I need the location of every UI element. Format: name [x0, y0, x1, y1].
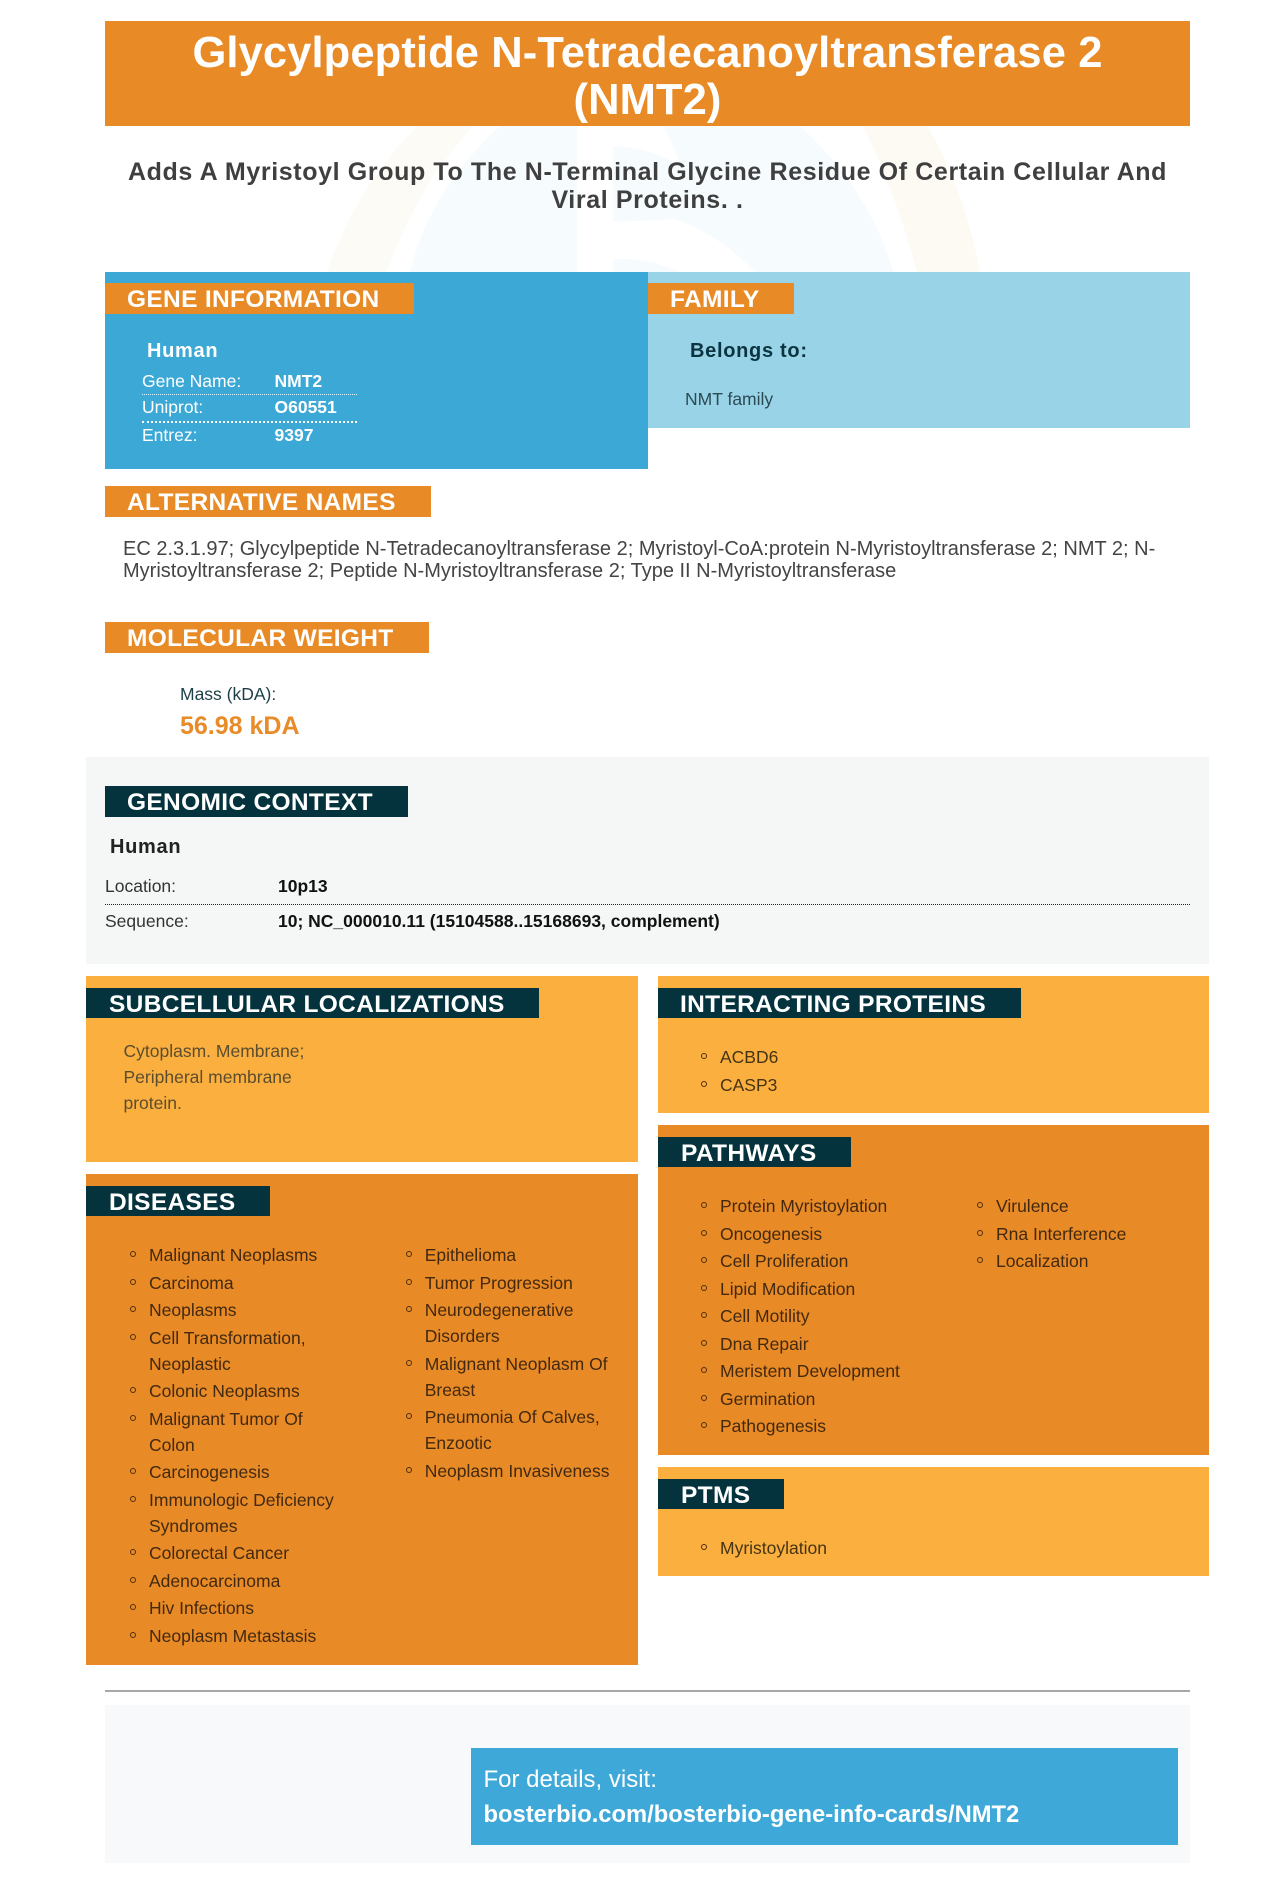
disease list column 2: Breast — [425, 1380, 475, 1400]
panel: family — [648, 272, 1190, 428]
disease list column 2 — [406, 1245, 610, 1480]
panel: interacting proteins — [658, 976, 1209, 1112]
localization text: protein. — [124, 1093, 182, 1113]
subtitle: Viral Proteins. . — [551, 186, 744, 214]
watermark logo — [327, 126, 980, 272]
disease list column 1: Cell Transformation, — [149, 1328, 306, 1348]
gene name row — [142, 373, 357, 395]
localization text: Peripheral membrane — [124, 1067, 292, 1087]
disease list column 1 — [130, 1245, 334, 1646]
panel: subcellular localizations — [86, 976, 638, 1162]
pathway list column 1: Germination — [720, 1388, 815, 1408]
entrez row: Entrez: — [142, 425, 197, 445]
location row: 10p13 — [278, 876, 328, 896]
disease list column 1: Neoplasm Metastasis — [149, 1626, 316, 1646]
heading: family — [648, 283, 794, 314]
belongs to label: Belongs to: — [690, 340, 808, 362]
uniprot row — [142, 399, 357, 423]
disease list column 1: Malignant Neoplasms — [149, 1245, 317, 1265]
heading: molecular weight: MOLECULAR WEIGHT — [127, 625, 394, 652]
location row — [105, 878, 1190, 905]
panel: diseases — [86, 1174, 638, 1665]
entrez row — [142, 425, 313, 445]
pathway list column 2: Virulence — [996, 1196, 1069, 1216]
pathway list column 1: Oncogenesis — [720, 1224, 822, 1244]
pathway list column 2: Localization — [996, 1251, 1088, 1271]
disease list column 2: Neurodegenerative — [425, 1300, 574, 1320]
callout label: For details, visit: — [484, 1766, 657, 1792]
heading: pathways — [658, 1137, 851, 1167]
disease list column 2: Enzootic — [425, 1433, 492, 1453]
pathway list column 2: Rna Interference — [996, 1224, 1126, 1244]
family value: NMT family — [685, 389, 773, 409]
pathway list column 1: Protein Myristoylation — [720, 1196, 887, 1216]
heading: genomic context: GENOMIC CONTEXT — [127, 789, 373, 816]
alternative names text: Myristoyltransferase 2; Peptide N-Myristoyltransferase 2; Type II N-Myristoyltransferase — [123, 560, 896, 582]
disease list column 1: Colorectal Cancer — [149, 1543, 289, 1563]
subtitle: Adds A Myristoyl Group To The N-Terminal Glycine Residue Of Certain Cellular And — [128, 158, 1167, 186]
species label: Human — [110, 836, 181, 858]
pathway list column 1: Cell Proliferation — [720, 1251, 848, 1271]
footer panel — [105, 1705, 1190, 1863]
heading: pathways: PATHWAYS — [681, 1140, 817, 1167]
pathway list column 1: Meristem Development — [720, 1361, 900, 1381]
title banner — [105, 21, 1190, 126]
disease list column 1: Malignant Tumor Of — [149, 1408, 303, 1428]
heading: subcellular localizations: SUBCELLULAR LOCALIZATIONS — [109, 991, 505, 1018]
pathway list column 1 — [701, 1196, 900, 1436]
localization text — [124, 1041, 304, 1113]
sequence row: Sequence: — [105, 911, 189, 931]
heading: interacting proteins: INTERACTING PROTEINS — [680, 991, 986, 1018]
protein list: CASP3 — [720, 1074, 777, 1094]
localization text: Cytoplasm. Membrane; — [124, 1041, 304, 1061]
disease list column 2: Pneumonia Of Calves, — [425, 1407, 600, 1427]
disease list column 1: Neoplasms — [149, 1300, 237, 1320]
mass label: Mass (kDA): — [180, 684, 276, 704]
mass value: 56.98 kDA — [180, 712, 300, 740]
gene name row: NMT2 — [274, 371, 322, 391]
pathway list column 1: Lipid Modification — [720, 1278, 855, 1298]
title banner: (NMT2) — [574, 76, 722, 124]
alternative names text — [123, 538, 1155, 582]
panel: gene information — [105, 272, 648, 469]
disease list column 1: Carcinoma — [149, 1272, 234, 1292]
disease list column 2: Epithelioma — [425, 1245, 516, 1265]
disease list column 1: Colon — [149, 1434, 195, 1454]
disease list column 1: Colonic Neoplasms — [149, 1381, 300, 1401]
heading: diseases: DISEASES — [109, 1189, 236, 1216]
disease list column 1: Syndromes — [149, 1516, 238, 1536]
pathway list column 1: Pathogenesis — [720, 1416, 826, 1436]
pathway list column 1: Cell Motility — [720, 1306, 809, 1326]
disease list column 1: Neoplastic — [149, 1354, 231, 1374]
disease list column 1: Immunologic Deficiency — [149, 1490, 334, 1510]
disease list column 1: Hiv Infections — [149, 1598, 254, 1618]
protein list: ACBD6 — [720, 1047, 778, 1067]
disease list column 2: Disorders — [425, 1326, 500, 1346]
title banner: Glycylpeptide N-Tetradecanoyltransferase 2 — [192, 29, 1102, 77]
sequence row: 10; NC_000010.11 (15104588..15168693, complement) — [278, 911, 720, 931]
ptm list: Myristoylation — [720, 1538, 827, 1558]
gene name row: Gene Name: — [142, 371, 241, 391]
heading: ptms — [658, 1479, 784, 1509]
uniprot row: O60551 — [274, 397, 337, 417]
heading: family: FAMILY — [670, 286, 760, 313]
heading: ptms: PTMS — [681, 1482, 750, 1509]
panel: ptms — [658, 1467, 1209, 1576]
heading: alternative names: ALTERNATIVE NAMES — [127, 489, 396, 516]
callout url: bosterbio.com/bosterbio-gene-info-cards/NMT2 — [484, 1801, 1019, 1828]
species label: Human — [147, 340, 218, 362]
panel: pathways — [658, 1125, 1209, 1454]
subtitle — [128, 158, 1167, 214]
heading: gene information: GENE INFORMATION — [127, 286, 380, 313]
alternative names text: EC 2.3.1.97; Glycylpeptide N-Tetradecanoyltransferase 2; Myristoyl-CoA:protein N-Myristoyltransferase 2; NMT 2; N- — [123, 538, 1155, 560]
pathway list column 2 — [977, 1196, 1126, 1271]
panel: genomic context — [86, 757, 1209, 964]
protein list — [701, 1047, 778, 1094]
disease list column 2: Neoplasm Invasiveness — [425, 1460, 610, 1480]
pathway list column 1: Dna Repair — [720, 1334, 809, 1354]
disease list column 1: Adenocarcinoma — [149, 1570, 280, 1590]
heading: diseases — [86, 1186, 270, 1216]
location row: Location: — [105, 876, 176, 896]
uniprot row: Uniprot: — [142, 397, 203, 417]
disease list column 2: Malignant Neoplasm Of — [425, 1354, 608, 1374]
disease list column 1: Carcinogenesis — [149, 1462, 270, 1482]
callout: details link — [471, 1748, 1178, 1845]
entrez row: 9397 — [274, 425, 313, 445]
disease list column 2: Tumor Progression — [425, 1272, 573, 1292]
